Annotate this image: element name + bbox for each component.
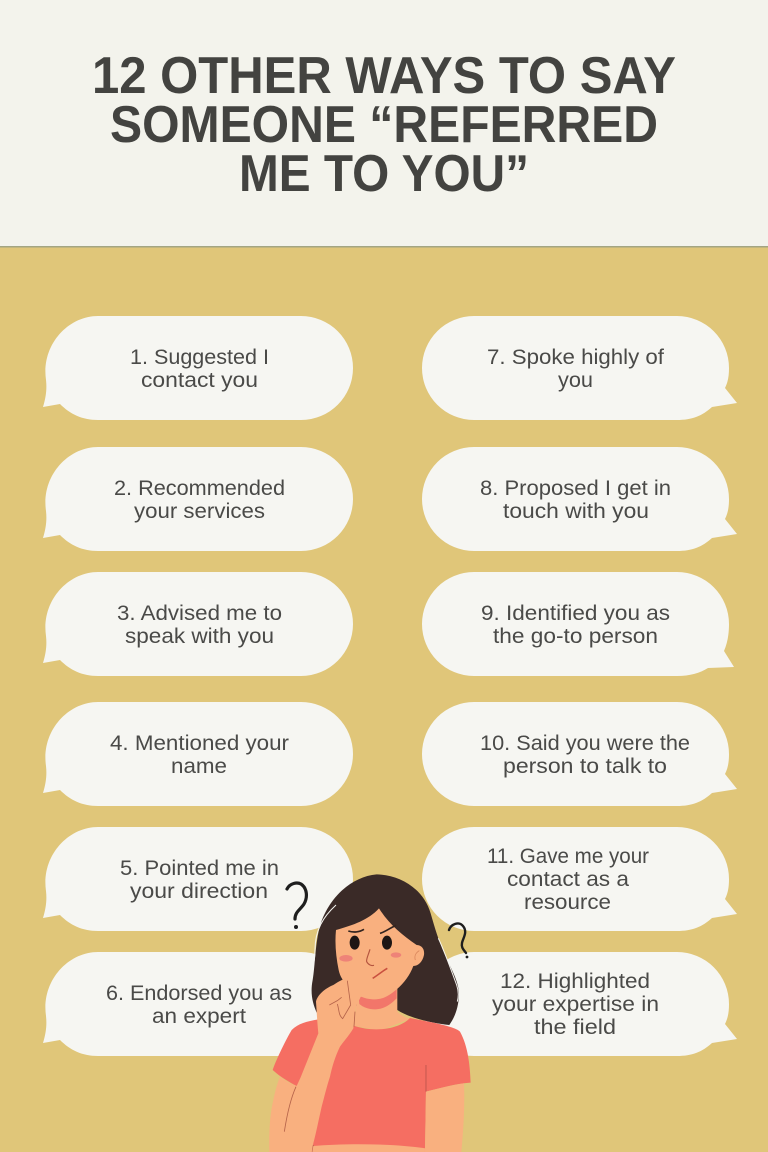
bubble 5: your direction [130,879,268,903]
bubble 2 [43,447,353,551]
bubble 8: touch with you [503,499,649,523]
icon: question mark left [287,883,306,929]
bubble 1 [43,316,353,420]
ear detail [415,951,419,960]
bubble 4: name [171,754,227,778]
fist lines [284,981,355,1152]
bubble 3 [43,572,353,676]
bubble 4: 4. Mentioned your [110,731,289,755]
title: 12 OTHER WAYS TO SAY [92,47,676,105]
bubble 12: 12. Highlighted [500,969,650,993]
bubble 2: 2. Recommended [114,476,285,500]
bubble 2: your services [134,499,265,523]
bubble 9: 9. Identified you as [481,601,670,625]
neck shadow [359,988,397,1009]
bubble 6: an expert [152,1004,246,1028]
skin below shirt hem [312,1144,425,1152]
bubble 11 [422,827,737,931]
illustration: thinking woman [269,874,471,1152]
bubble 10 [422,702,737,806]
title: ME TO YOU” [239,145,529,203]
bubble 7: 7. Spoke highly of [487,345,664,369]
shirt fold [425,1065,427,1092]
bubble 7: you [558,368,593,392]
bubble 9: the go-to person [493,624,658,648]
bubble 11: resource [524,890,611,914]
bubble 12 [422,952,737,1056]
bubble 12: your expertise in [492,992,659,1016]
hair highlight strokes [310,905,458,1002]
icon: question mark right [449,923,468,958]
bubble 10: 10. Said you were the [480,731,690,755]
bubble 9 [422,572,734,676]
bubble 4 [43,702,353,806]
bubble 11: 11. Gave me your [487,844,649,868]
bubble 3: 3. Advised me to [117,601,282,625]
bent arm and fist [269,978,362,1152]
hair [312,874,459,1025]
bubble 3: speak with you [125,624,274,648]
shirt [273,1018,471,1152]
nose and mouth [367,949,374,966]
bubble 6: 6. Endorsed you as [106,981,292,1005]
eyebrows [348,925,396,933]
face [335,908,424,999]
title [92,47,676,203]
bubble 10: person to talk to [503,754,667,778]
cheeks [339,952,401,962]
bubble 7 [422,316,737,420]
bubble 11: contact as a [507,867,629,891]
bubble 1: 1. Suggested I [130,345,269,369]
header panel [0,0,768,248]
right arm [425,1083,464,1152]
bubble 5 [43,827,353,931]
title: SOMEONE “REFERRED [110,96,658,154]
bubble 12: the field [534,1015,616,1039]
bubble 5: 5. Pointed me in [120,856,279,880]
bubble 8: 8. Proposed I get in [480,476,671,500]
neck [353,985,411,1031]
bubble 1: contact you [141,368,258,392]
eyes [350,936,392,950]
bubble 6 [43,952,353,1056]
bubble 8 [422,447,737,551]
